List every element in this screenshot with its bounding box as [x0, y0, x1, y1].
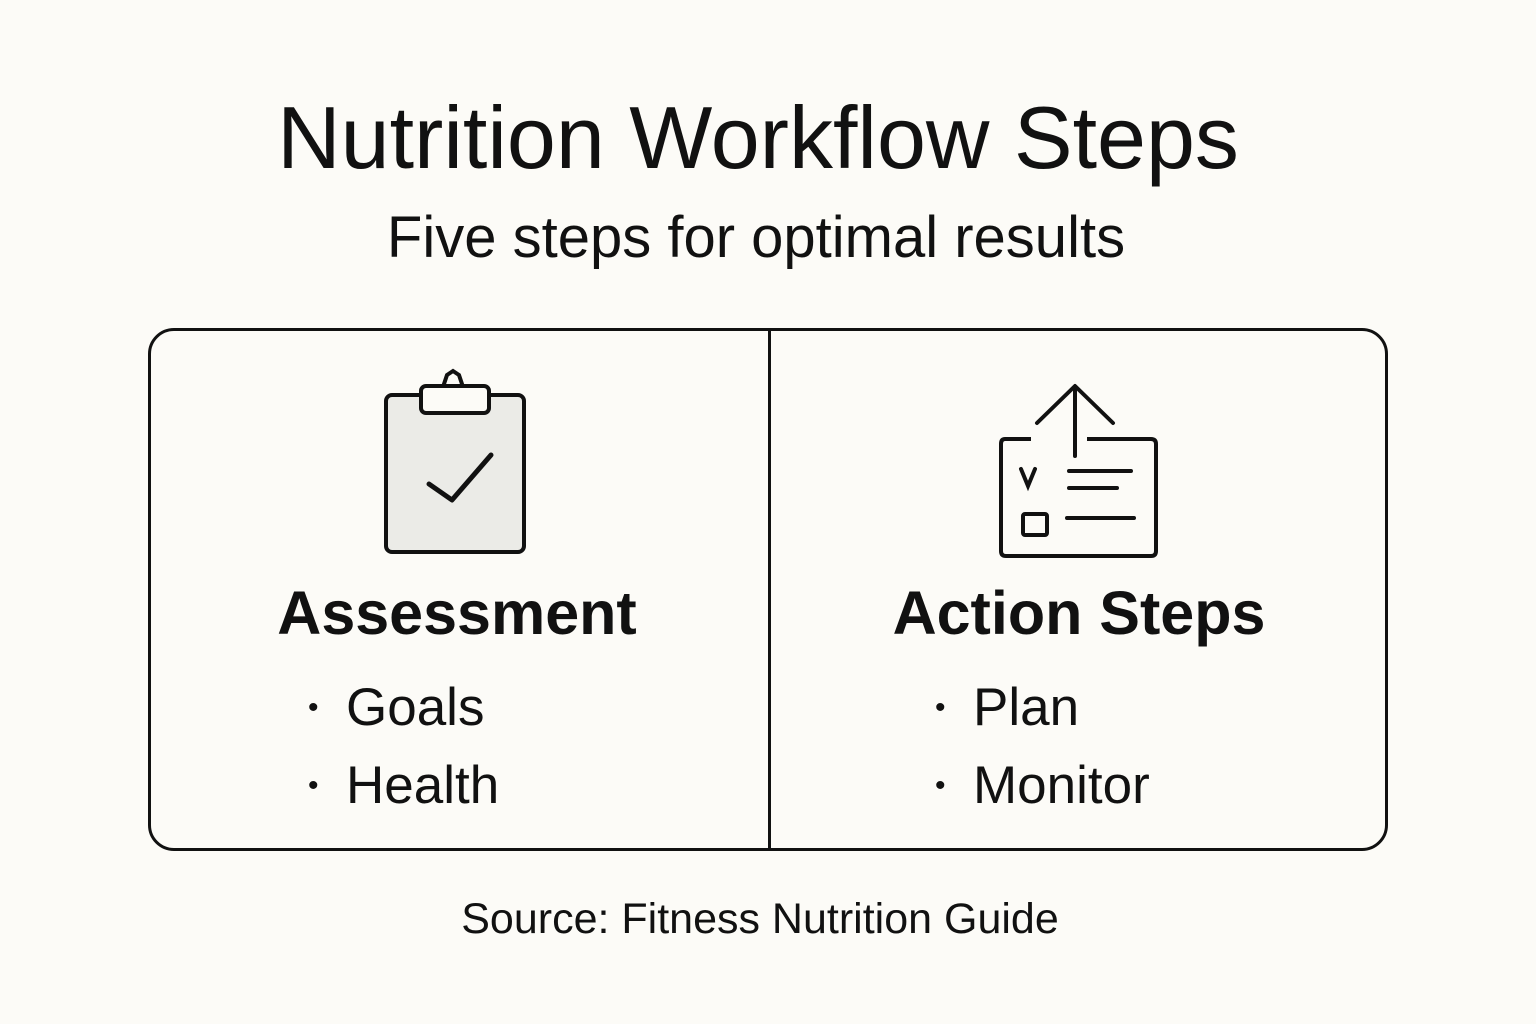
- divider: [768, 331, 771, 848]
- heading: Assessment: Assessment: [277, 579, 637, 647]
- panel: main: [148, 328, 1388, 851]
- icon: checklist with arrow: [999, 384, 1158, 558]
- bullets: action steps: •: [935, 769, 946, 802]
- panel: assessment: [277, 368, 637, 815]
- heading: Action Steps: Action Steps: [893, 579, 1265, 647]
- bullets: assessment: •: [308, 769, 319, 802]
- bullets: assessment: [308, 678, 499, 815]
- bullets: assessment: •: [308, 691, 319, 724]
- bullets: action steps: [935, 678, 1150, 815]
- icon: clipboard: [384, 368, 526, 554]
- bullets: action steps: •: [935, 691, 946, 724]
- source: Source: Fitness Nutrition Guide: [461, 895, 1059, 943]
- bullets: action steps: Plan: [973, 678, 1079, 737]
- bullets: assessment: Goals: [346, 678, 484, 737]
- bullets: assessment: Health: [346, 756, 499, 815]
- bullets: action steps: Monitor: [973, 756, 1150, 815]
- subtitle: Five steps for optimal results: [387, 205, 1125, 270]
- panel: action steps: [893, 384, 1265, 815]
- title: Nutrition Workflow Steps: [277, 88, 1239, 187]
